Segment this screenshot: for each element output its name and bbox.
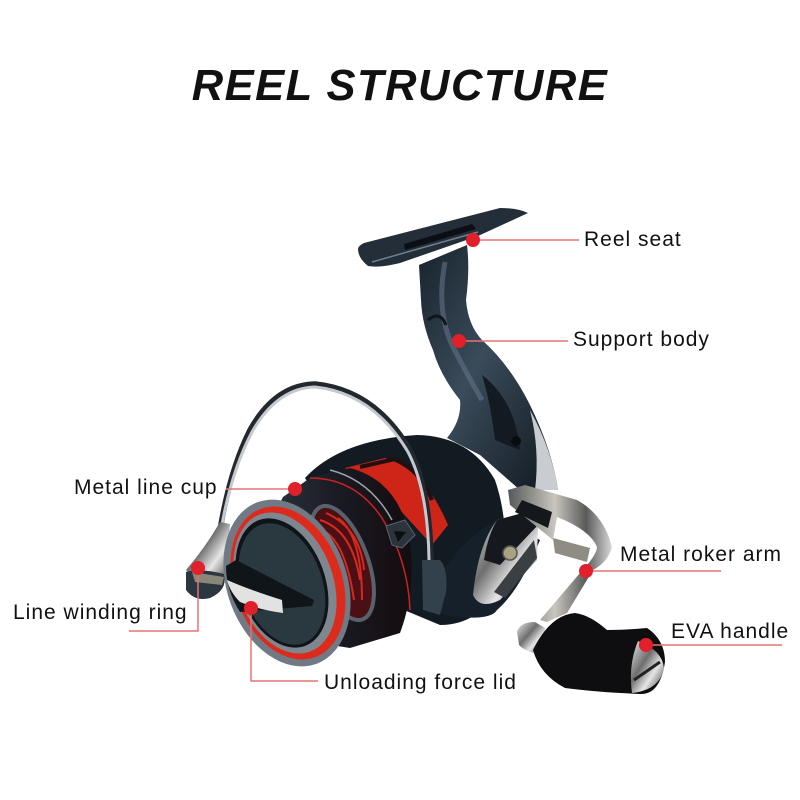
callout: EVA handle (639, 620, 789, 652)
callout: Line winding ring: Line winding ring (13, 601, 188, 624)
callout: Reel seat: Reel seat (584, 228, 682, 251)
callout: Reel seat (466, 228, 682, 251)
callout: EVA handle: EVA handle (671, 620, 789, 643)
bail arm block (422, 560, 446, 615)
title: REEL STRUCTURE (192, 62, 609, 110)
callout: Support body (452, 328, 710, 351)
callout: Line winding ring (13, 561, 205, 631)
reel seat (358, 208, 528, 267)
callout: Support body: Support body (573, 328, 710, 351)
spool front flange (201, 482, 373, 684)
callout: Metal line cup (74, 476, 302, 499)
red line on spool (297, 498, 387, 628)
red spool behind rotor (345, 458, 448, 545)
rotor cup (305, 435, 505, 625)
illustration: spinning reel (186, 208, 665, 694)
support body (419, 245, 558, 490)
spool body (250, 468, 415, 648)
callout: Unloading force lid: Unloading force lid (324, 671, 517, 694)
callout: Unloading force lid (244, 601, 517, 694)
unloading force lid knob (226, 560, 314, 613)
right side gear housing (425, 520, 540, 618)
callout: Metal roker arm (579, 543, 782, 578)
callout: Metal roker arm: Metal roker arm (620, 543, 782, 566)
callout: Metal line cup: Metal line cup (74, 476, 218, 499)
EVA handle (533, 613, 665, 694)
metal rocker arm (508, 485, 612, 654)
bail wire (220, 384, 431, 560)
line winding ring (186, 522, 230, 599)
